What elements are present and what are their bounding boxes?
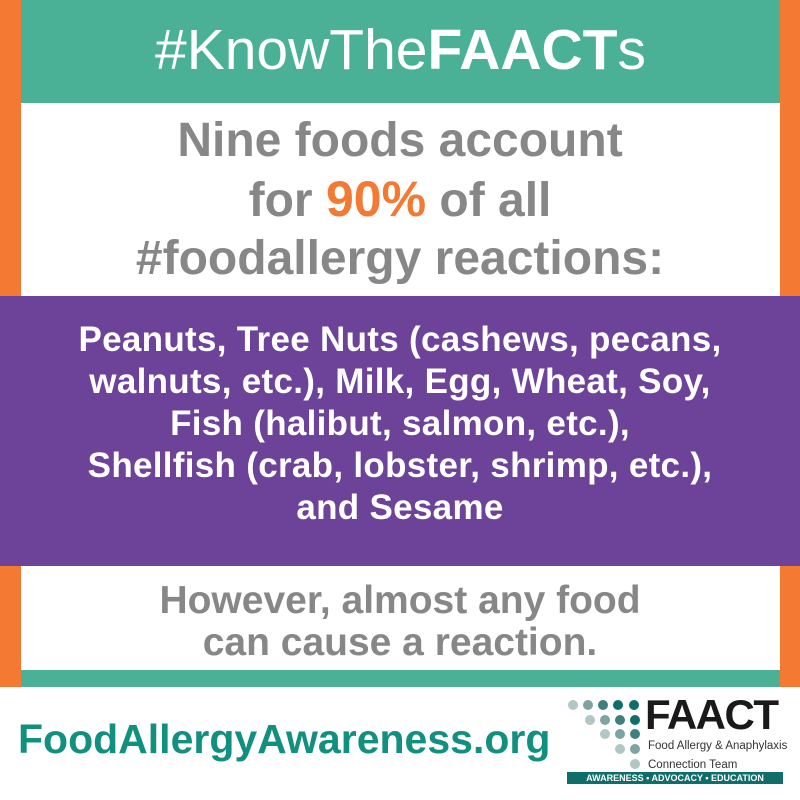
closing text: can cause a reaction. bbox=[203, 621, 597, 664]
teal divider band bbox=[21, 670, 780, 687]
title bar: #KnowTheFAACTs bbox=[155, 18, 646, 82]
purple panel: food list bbox=[0, 296, 800, 566]
heading text bbox=[136, 114, 664, 285]
logo subtitle: Food Allergy & Anaphylaxis bbox=[648, 740, 787, 752]
logo: FAACT bbox=[567, 691, 787, 784]
logo subtitle: Connection Team bbox=[648, 759, 737, 771]
purple panel: food list: and Sesame bbox=[296, 488, 504, 527]
heading text: Nine foods account bbox=[177, 114, 623, 167]
logo tagline bar: AWARENESS • ADVOCACY • EDUCATION bbox=[586, 773, 764, 783]
title bar bbox=[21, 0, 780, 103]
logo tagline bar bbox=[567, 772, 783, 784]
closing text: However, almost any food bbox=[159, 579, 641, 622]
heading text: #foodallergy reactions: bbox=[136, 232, 664, 285]
closing text bbox=[159, 579, 641, 664]
purple panel: food list: Fish (halibut, salmon, etc.), bbox=[170, 404, 630, 443]
right orange stripe bbox=[780, 0, 800, 687]
logo wordmark: FAACT bbox=[645, 691, 778, 738]
heading text: for 90% of all bbox=[249, 171, 551, 227]
logo subtitle bbox=[648, 740, 787, 771]
purple panel: food list: Peanuts, Tree Nuts (cashews, pecans, bbox=[78, 320, 722, 359]
website url: FoodAllergyAwareness.org bbox=[18, 716, 550, 762]
icon: dot grid bbox=[568, 700, 640, 769]
purple panel: food list: walnuts, etc.), Milk, Egg, Wheat, Soy, bbox=[89, 362, 711, 401]
left orange stripe bbox=[0, 0, 21, 687]
purple panel: food list: Shellfish (crab, lobster, shrimp, etc.), bbox=[88, 446, 712, 485]
